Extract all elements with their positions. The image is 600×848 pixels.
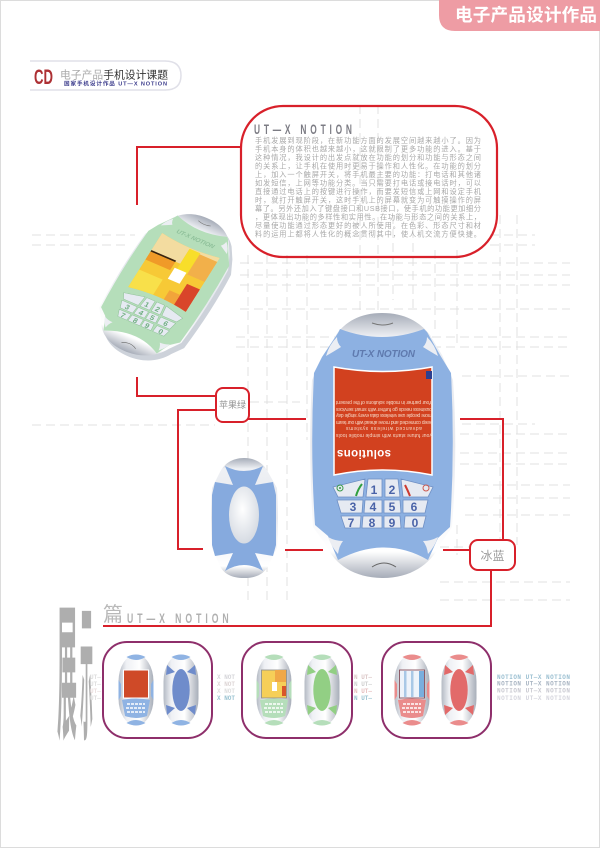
- faint name strips: N UT—: [354, 688, 372, 695]
- section heading: 篇: [103, 603, 123, 626]
- blue phone back: [211, 458, 278, 578]
- label: ice blue: 冰蓝: [480, 549, 505, 563]
- label: apple green: [216, 388, 249, 422]
- green small screen: [262, 670, 286, 698]
- faint name strips: NOTION UT—X NOTION: [497, 680, 570, 688]
- description text: 尽量使功能通过形态更好的被人所使用。在色彩、形态尺寸和材: [255, 221, 481, 230]
- course title: 电子产品手机设计课题: [60, 68, 168, 82]
- faint name strips: NOTION UT—X NOTION: [497, 674, 570, 681]
- blue small front: [118, 654, 154, 726]
- faint name strips: X NOT: [217, 695, 235, 702]
- blue phone keypad labels: [337, 483, 429, 530]
- faint name strips: UT—: [90, 674, 101, 681]
- vertical heading: [57, 594, 93, 759]
- blue phone front: [310, 313, 455, 578]
- course title pill: [30, 61, 181, 90]
- upside-down screen text: keep connected and move ahead with our team: [336, 419, 432, 425]
- faint name strips: X NOT: [217, 674, 235, 681]
- blue phone keypad labels: 4: [370, 500, 377, 514]
- description text: ，更体现出功能的多样性和实用性。在功能与形态之间的关系上，: [255, 212, 481, 222]
- description text: 时，就打开触屏开关，这时手机上的屏幕就变为可触摸操作的屏: [255, 196, 481, 204]
- label: ice blue: [470, 540, 515, 570]
- upside-down screen text: your future starts with simple mobile tools: [336, 432, 432, 438]
- description text: 直接通过电话上的按键进行操作，而要发短信或上网和设定手机: [255, 187, 482, 196]
- green phone screen: [127, 232, 221, 313]
- vertical heading: 展: [57, 594, 77, 759]
- description text: 手机本身的体积也越来越小，这就限制了更多功能的进入。基于: [255, 144, 481, 154]
- panel: blue variant: [103, 642, 212, 738]
- faint name strips: N UT—: [354, 674, 372, 681]
- description text: 手机发展到现阶段，在新功能方面的发展空间越来越小了。因为: [255, 136, 481, 145]
- blue phone keypad labels: 5: [389, 500, 396, 514]
- back oval: [229, 486, 259, 544]
- blue phone keypad labels: 0: [412, 516, 419, 530]
- green phone: [101, 214, 232, 360]
- blue phone keypad labels: 3: [350, 500, 357, 514]
- faint name strips: [90, 674, 570, 702]
- green phone keypad digits: 4: [137, 308, 146, 318]
- description text: 料的运用上都将人性化的概念贯彻其中，使人机交流方便快捷。: [255, 230, 481, 238]
- course subtitle: 国家手机设计作品 UT—X NOTION: [64, 80, 167, 88]
- upside-down screen text: Your partner in mobile solutions of the present: [335, 399, 432, 405]
- faint name strips: NOTION UT—X NOTION: [497, 695, 570, 702]
- green phone keypad digits: 0: [156, 327, 165, 336]
- red connector lines: [103, 147, 503, 626]
- faint name strips: N UT—: [354, 681, 372, 688]
- header tag: [439, 0, 600, 31]
- label: apple green: 苹果绿: [219, 399, 246, 410]
- green phone keypad digits: 1: [143, 300, 151, 309]
- panel: description: [241, 106, 497, 257]
- vertical heading: 示: [80, 595, 93, 759]
- description text: [255, 136, 482, 238]
- green phone brand: UT-X NOTION: [175, 229, 216, 250]
- red small screen: [400, 670, 424, 698]
- upside-down screen text: business needs go further with smart services: [336, 406, 432, 412]
- red small back: [442, 654, 476, 726]
- faint name strips: UT—: [90, 681, 101, 688]
- green phone keypad digits: 3: [123, 303, 132, 312]
- panel: green variant: [242, 642, 352, 738]
- green phone keypad digits: 9: [143, 321, 151, 330]
- faint name strips: UT—: [90, 695, 101, 702]
- green phone keypad digits: 2: [153, 305, 162, 314]
- upside-down screen text: more people use wireless data every single day: [336, 412, 432, 418]
- section heading: UT—X NOTION: [127, 611, 229, 627]
- description text: 的关系上，让手机在使用时更易于操作和人性化。在功能的划分: [255, 162, 481, 170]
- blue phone brand: UT-X NOTION: [352, 349, 416, 360]
- blue phone keypad labels: 6: [411, 500, 418, 514]
- panel: red variant: [382, 642, 491, 738]
- blue phone screen: [334, 367, 432, 475]
- description text: 如发短信，上网等功能分类。当只需要打电话或接电话时，可以: [255, 178, 481, 188]
- blue small screen: [124, 670, 148, 698]
- screen corner icon: [426, 371, 432, 379]
- faint name strips: N UT—: [354, 695, 372, 702]
- green small front: [256, 654, 292, 726]
- blue phone keypad labels: 7: [348, 516, 355, 530]
- green phone keypad digits: 6: [161, 319, 170, 328]
- CD mark: CD: [34, 66, 53, 89]
- blue phone keypad labels: 9: [389, 516, 396, 530]
- faint name strips: NOTION UT—X NOTION: [497, 688, 570, 694]
- upside-down screen text: solutions: [337, 447, 391, 459]
- green small back: [304, 654, 340, 726]
- description text: 幕了。另外还加入了键盘接口和USB接口，使手机的功能更加细分: [255, 204, 481, 213]
- blue phone keypad labels: 8: [369, 516, 376, 530]
- green phone keypad digits: 8: [131, 316, 140, 325]
- faint name strips: UT—: [90, 688, 101, 695]
- faint name strips: X NOT: [217, 688, 235, 695]
- red small front: [394, 654, 430, 726]
- green phone keypad digits: [118, 294, 175, 336]
- green phone keypad digits: 7: [119, 311, 127, 320]
- upside-down screen text: [335, 399, 432, 459]
- blue phone keypad labels: 2: [389, 483, 396, 497]
- description text: 这种情况，我设计的出发点就放在功能的划分和功能与形态之间: [255, 153, 481, 162]
- faint name strips: X NOT: [217, 681, 235, 688]
- section heading: [103, 603, 229, 627]
- upside-down screen text: advanced wireless systems: [346, 425, 422, 431]
- green phone keypad digits: 5: [148, 313, 156, 322]
- description title: UT—X NOTION: [254, 123, 352, 138]
- blue phone keypad labels: 1: [371, 483, 378, 497]
- blue small back: [164, 654, 198, 726]
- description text: 上，加入一个触屏开关，将手机最主要的功能：打电话和其他诸: [255, 170, 481, 179]
- tag title: 电子产品设计作品: [455, 5, 597, 25]
